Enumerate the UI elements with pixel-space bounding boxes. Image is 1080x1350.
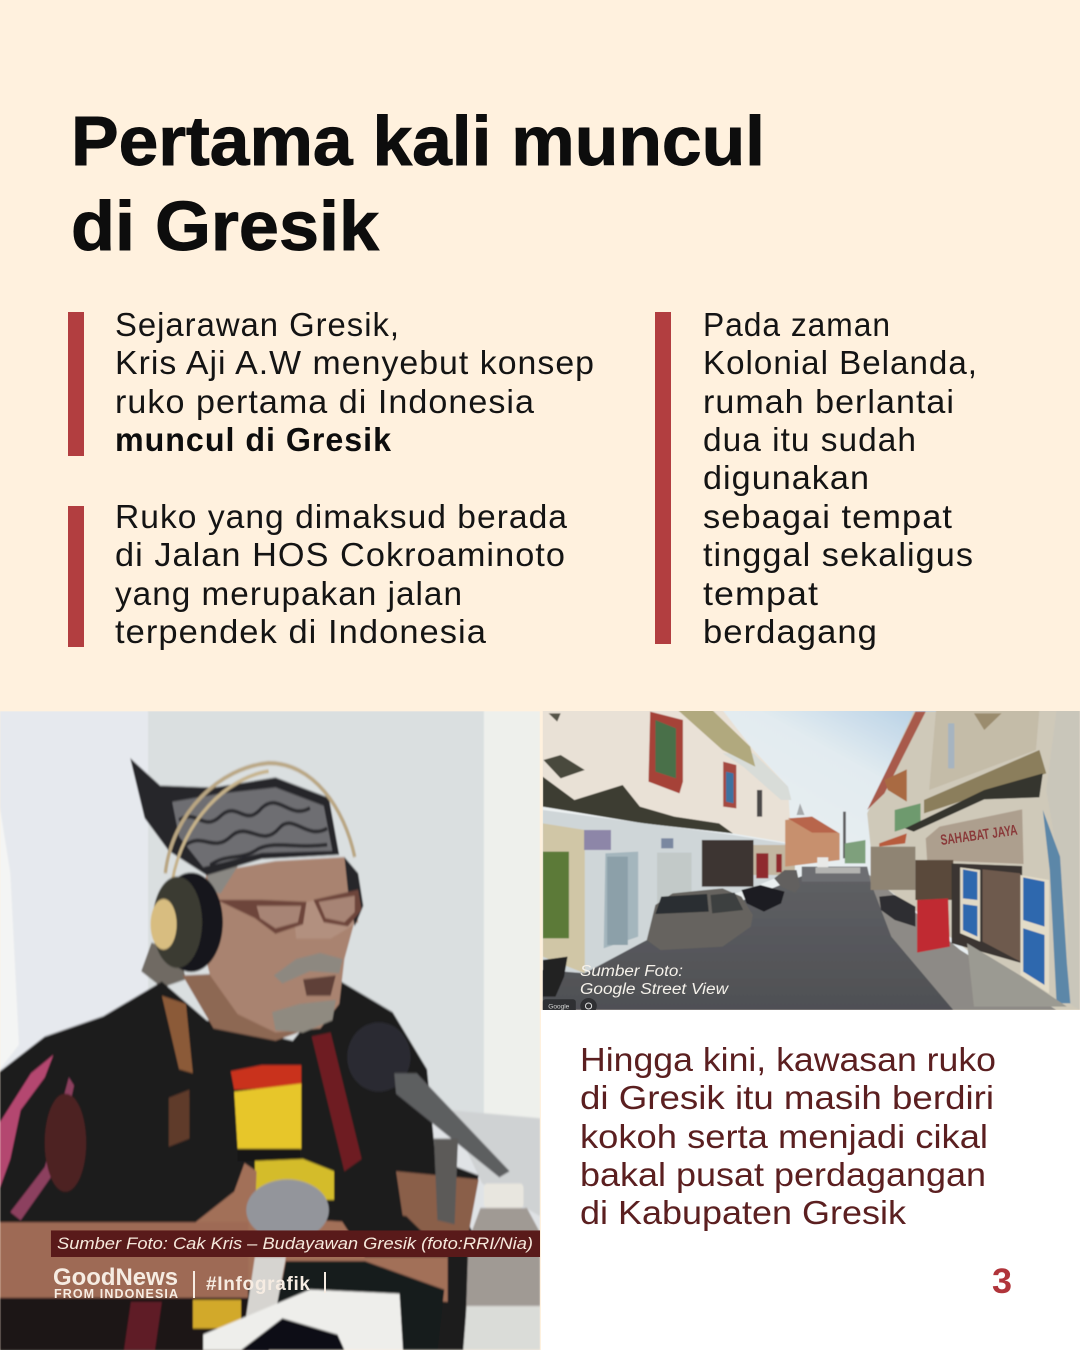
text block: Sejarawan Gresik <box>68 306 595 458</box>
photo credit: Google Street View <box>580 963 730 998</box>
closing text block: bakal pusat perdagangan <box>580 1156 986 1193</box>
closing text block: kokoh serta menjadi cikal <box>580 1118 988 1155</box>
lower clothes <box>0 1298 269 1350</box>
hashtag: Infografik: #Infografik <box>206 1274 310 1295</box>
text block: Jalan HOS Cokroaminoto: di Jalan HOS Cokroaminoto <box>115 536 566 573</box>
title <box>71 102 765 265</box>
hashtag: Infografik <box>193 1271 326 1298</box>
top microphone <box>347 1022 411 1092</box>
text block: Kolonial Belanda: tempat <box>703 575 819 612</box>
caption bar: photo credit <box>51 1230 540 1257</box>
shop sign <box>926 809 1024 864</box>
closing text block <box>580 1041 996 1231</box>
closing text block: di Kabupaten Gresik <box>580 1194 907 1231</box>
text block: Sejarawan Gresik: muncul di Gresik <box>115 421 392 458</box>
t-shirt graphic <box>231 1065 301 1090</box>
shop doors and blue panels <box>952 863 1022 963</box>
text block: Jalan HOS Cokroaminoto <box>68 498 568 650</box>
hair under hat <box>207 864 238 894</box>
Google mark: Google <box>548 1004 570 1011</box>
text block: Kolonial Belanda: dua itu sudah <box>703 421 917 458</box>
left ground floor <box>543 810 795 973</box>
text block: Kolonial Belanda: berdagang <box>703 613 878 650</box>
moustache and beard <box>274 953 343 983</box>
hand and arm <box>193 1163 448 1302</box>
logo: GoodNews from Indonesia: FROM INDONESIA <box>54 1287 178 1301</box>
left building upper <box>542 710 791 843</box>
photo: street view of ruko in Gresik <box>540 710 1080 1014</box>
panel: closing note background <box>541 1010 1080 1350</box>
text block: Kolonial Belanda: rumah berlantai <box>703 383 955 420</box>
text block: Kolonial Belanda: digunakan <box>703 459 870 496</box>
glasses <box>217 900 307 934</box>
text block: Sejarawan Gresik: Kris Aji A.W menyebut konsep <box>115 344 595 381</box>
moss stains <box>543 777 733 833</box>
closing text block: Hingga kini, kawasan ruko <box>580 1041 996 1078</box>
photo credit text: Sumber Foto: Cak Kris – Budayawan Gresik (foto:RRI/Nia) <box>57 1234 533 1253</box>
neck and face <box>183 971 310 1041</box>
right building <box>867 710 1080 1010</box>
photo: Cak Kris at microphone <box>0 710 540 1350</box>
page number: 3 <box>992 1262 1012 1301</box>
distant buildings <box>785 817 840 867</box>
text block: Kolonial Belanda <box>655 306 978 650</box>
photo credit: Google Street View: Sumber Foto: <box>580 963 683 980</box>
text block: Sejarawan Gresik: ruko pertama di Indonesia <box>115 383 535 420</box>
road <box>542 876 954 1010</box>
title: di Gresik <box>71 187 379 265</box>
hat <box>130 758 339 875</box>
text block: Jalan HOS Cokroaminoto: Ruko yang dimaksud berada <box>115 498 568 535</box>
red crates and scooters <box>917 898 950 953</box>
body <box>0 980 480 1350</box>
photo credit: Google Street View: Google Street View <box>580 981 730 998</box>
text block: Sejarawan Gresik: Sejarawan Gresik, <box>115 306 400 343</box>
text block: Kolonial Belanda: sebagai tempat <box>703 498 953 535</box>
text block: Kolonial Belanda: tinggal sekaligus <box>703 536 974 573</box>
logo: GoodNews from Indonesia: GoodNews <box>53 1264 178 1291</box>
ikat sleeve <box>0 1055 53 1188</box>
windows <box>648 712 683 793</box>
collar strips <box>162 996 193 1073</box>
text block: Kolonial Belanda: Kolonial Belanda, <box>703 344 978 381</box>
sign lettering: SAHABAT JAYA <box>940 823 1019 849</box>
hair <box>141 943 186 988</box>
stand mic <box>245 1257 287 1318</box>
bottle <box>484 1184 523 1208</box>
text block: Jalan HOS Cokroaminoto: yang merupakan jalan <box>115 575 463 612</box>
headphones <box>165 763 355 873</box>
awnings <box>905 773 1043 832</box>
Google mark <box>542 998 597 1010</box>
title: Pertama kali muncul <box>71 102 765 180</box>
parked car <box>647 888 753 950</box>
closing text block: di Gresik itu masih berdiri <box>580 1079 994 1116</box>
text block: Jalan HOS Cokroaminoto: terpendek di Indonesia <box>115 613 487 650</box>
motorbikes and far car <box>741 885 785 912</box>
text block: Kolonial Belanda: Pada zaman <box>703 306 891 343</box>
